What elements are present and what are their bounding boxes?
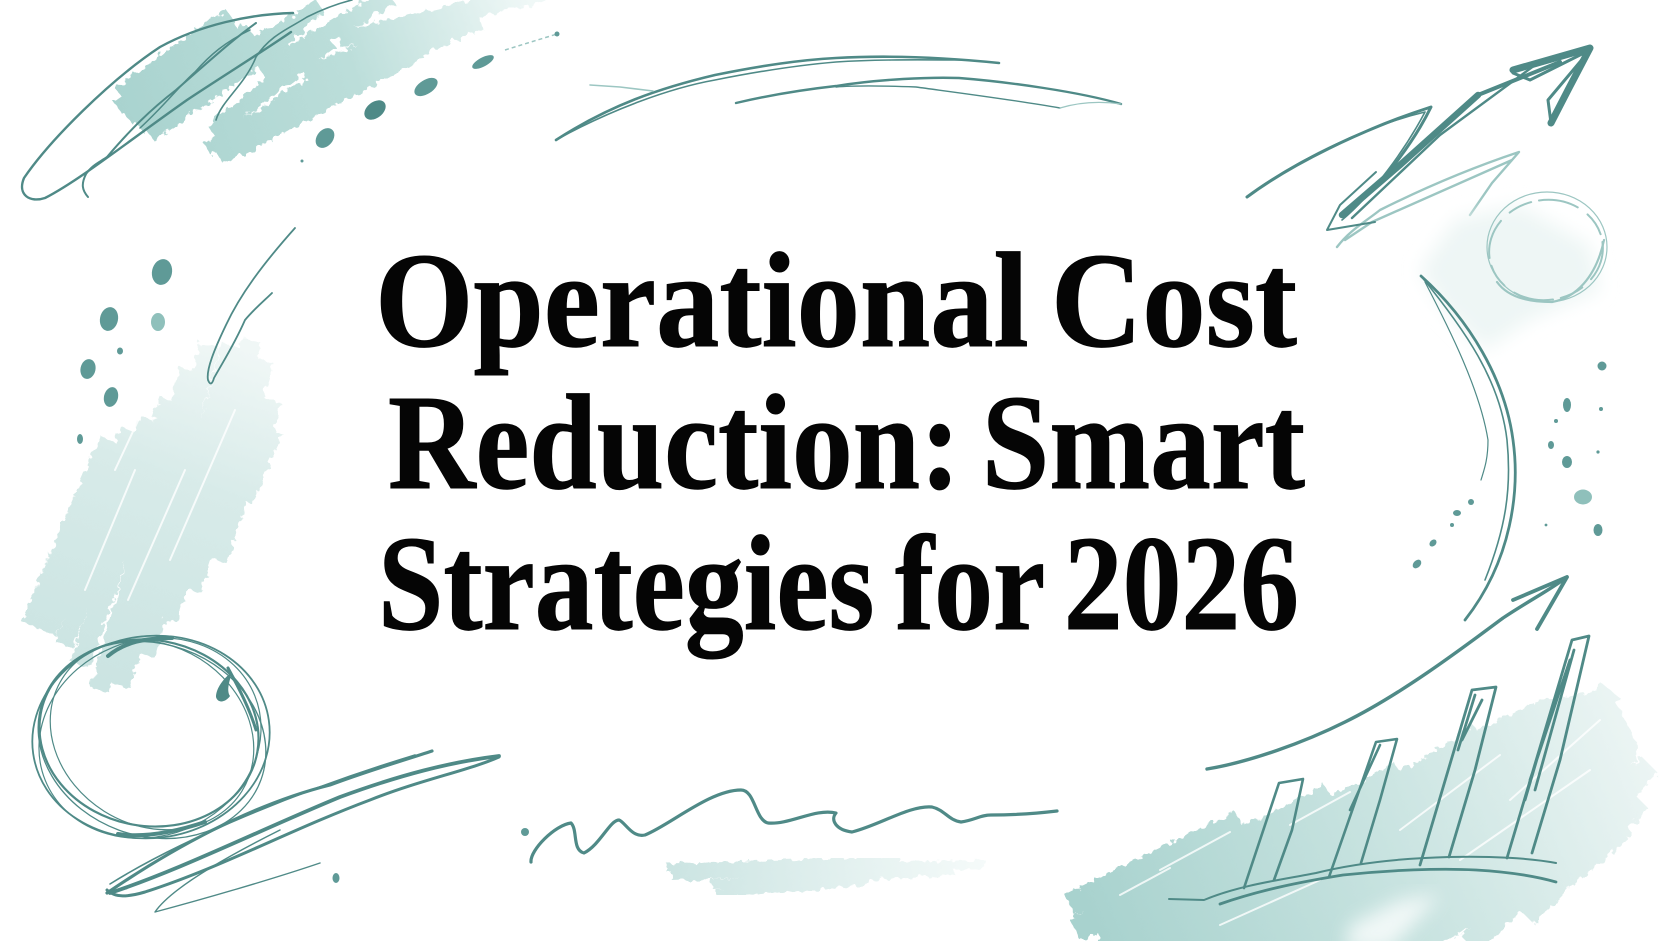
watercolor wash: left xyxy=(30,340,274,690)
wash streaks xyxy=(1120,720,1600,925)
sketch: bottom left circle xyxy=(9,603,294,871)
sketch: pale circle xyxy=(1483,192,1609,307)
baseline strokes xyxy=(1169,857,1556,900)
pale zigzag echo xyxy=(1337,152,1519,247)
sketch: top right zigzag arrow xyxy=(1247,48,1590,247)
bar chart sketch xyxy=(1169,636,1589,904)
watercolor wash: bottom middle xyxy=(667,860,985,893)
left wash streaks xyxy=(85,395,235,600)
title: Reduction: Smart xyxy=(388,368,1305,518)
bar 1 xyxy=(1244,779,1303,888)
sketch: bottom squiggle xyxy=(521,790,1057,862)
pale wash: right xyxy=(1420,205,1600,350)
bar 2 xyxy=(1329,739,1397,877)
sketch: top arc swooshes xyxy=(556,57,1121,140)
sketch: bottom left slashes xyxy=(107,751,499,912)
sketch: top left scribble xyxy=(22,0,352,199)
title xyxy=(375,226,1305,659)
splatter dots: right xyxy=(1411,362,1606,570)
circle ink blot xyxy=(216,672,232,701)
wash highlight gap xyxy=(1345,895,1440,941)
bar 3 xyxy=(1420,687,1496,865)
watercolor wash: bottom right xyxy=(1070,690,1650,941)
splatter dots: top xyxy=(300,32,560,162)
arrowhead xyxy=(1513,48,1590,123)
bar 4 xyxy=(1507,636,1589,858)
sketch: right arc xyxy=(1421,276,1515,620)
rising trend arrow xyxy=(1207,577,1567,769)
splatter dots: left xyxy=(77,257,174,444)
title: Operational Cost xyxy=(375,226,1297,376)
sketch: left hook xyxy=(208,228,295,384)
title: Strategies for 2026 xyxy=(378,509,1299,659)
watercolor wash: top left xyxy=(118,0,545,158)
